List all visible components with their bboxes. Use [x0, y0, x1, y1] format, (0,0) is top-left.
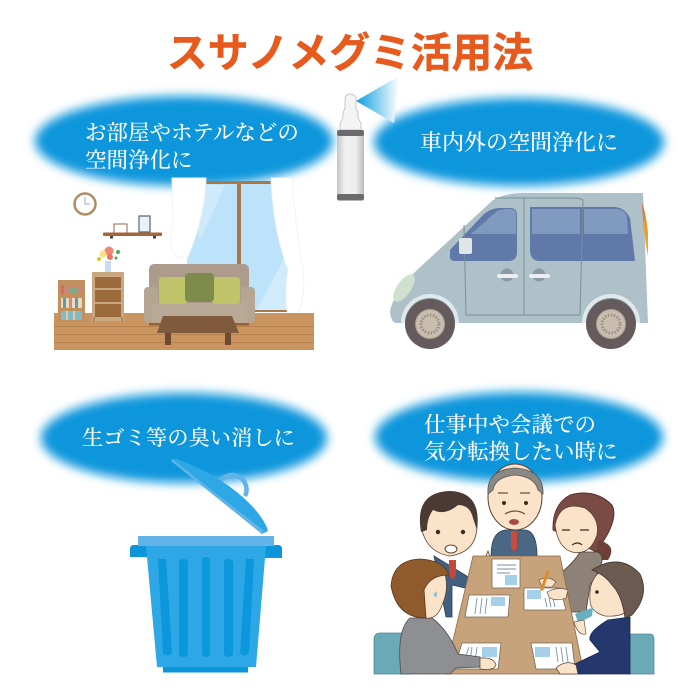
bubble text: meeting use: 仕事中や会議での: [424, 413, 596, 437]
door handles: [497, 268, 550, 282]
dresser: [92, 272, 124, 322]
person: woman on right: [548, 493, 614, 612]
floor: [54, 313, 314, 350]
bubble: meeting use: [375, 392, 663, 482]
bubble text: garbage use: 生ゴミ等の臭い消しに: [82, 426, 295, 450]
coffee table: [157, 316, 239, 345]
can body: [146, 546, 266, 667]
bubble: car use: [374, 98, 664, 186]
icon: trash can: [130, 459, 282, 672]
base: [163, 667, 248, 672]
lid: [171, 459, 268, 534]
illustration: meeting: [374, 464, 654, 674]
bubble: room use: [35, 96, 333, 186]
side window reflection: [532, 209, 628, 234]
curtain left: [171, 178, 206, 257]
bubble text: car use: 車内外の空間浄化に: [420, 130, 618, 155]
bubble text: room use: お部屋やホテルなどの: [85, 121, 299, 145]
flower vase: [97, 246, 120, 272]
wall shelf: [103, 216, 162, 238]
slats: [158, 557, 254, 657]
person: man on left: [420, 491, 492, 617]
rear wheel: [582, 294, 640, 349]
bookshelf: [58, 280, 85, 322]
bubble text: room use: 空間浄化に: [85, 148, 193, 172]
chair right: [629, 634, 654, 674]
bubble: garbage use: [41, 393, 327, 483]
illustration: living room: [54, 178, 314, 350]
documents: [454, 559, 575, 669]
front wheel: [401, 294, 459, 349]
icon: spray bottle: [337, 76, 399, 200]
van body: [390, 193, 648, 323]
illustration: van: [389, 193, 648, 349]
front window: [450, 208, 517, 261]
sofa: [144, 264, 255, 326]
woman's hands and pen: [539, 570, 568, 600]
chair left: [374, 633, 411, 674]
side windows: [530, 207, 635, 261]
bubble text: meeting use: 気分転換したい時に: [424, 440, 618, 464]
title: スサノメグミ活用法: [167, 30, 533, 76]
person: woman in front right: [556, 562, 644, 674]
person: man in front left: [391, 559, 496, 674]
person: man in back centre: [488, 464, 543, 556]
curtain right: [271, 178, 304, 314]
front window reflection: [471, 209, 516, 234]
handles: [130, 545, 282, 558]
door lines: [464, 198, 583, 315]
window: [187, 181, 289, 312]
mirror: [459, 238, 472, 254]
tail light: [642, 202, 648, 256]
rim: [138, 536, 274, 546]
headlight: [389, 271, 419, 305]
meeting table: [445, 556, 584, 674]
wall clock: [74, 194, 96, 214]
